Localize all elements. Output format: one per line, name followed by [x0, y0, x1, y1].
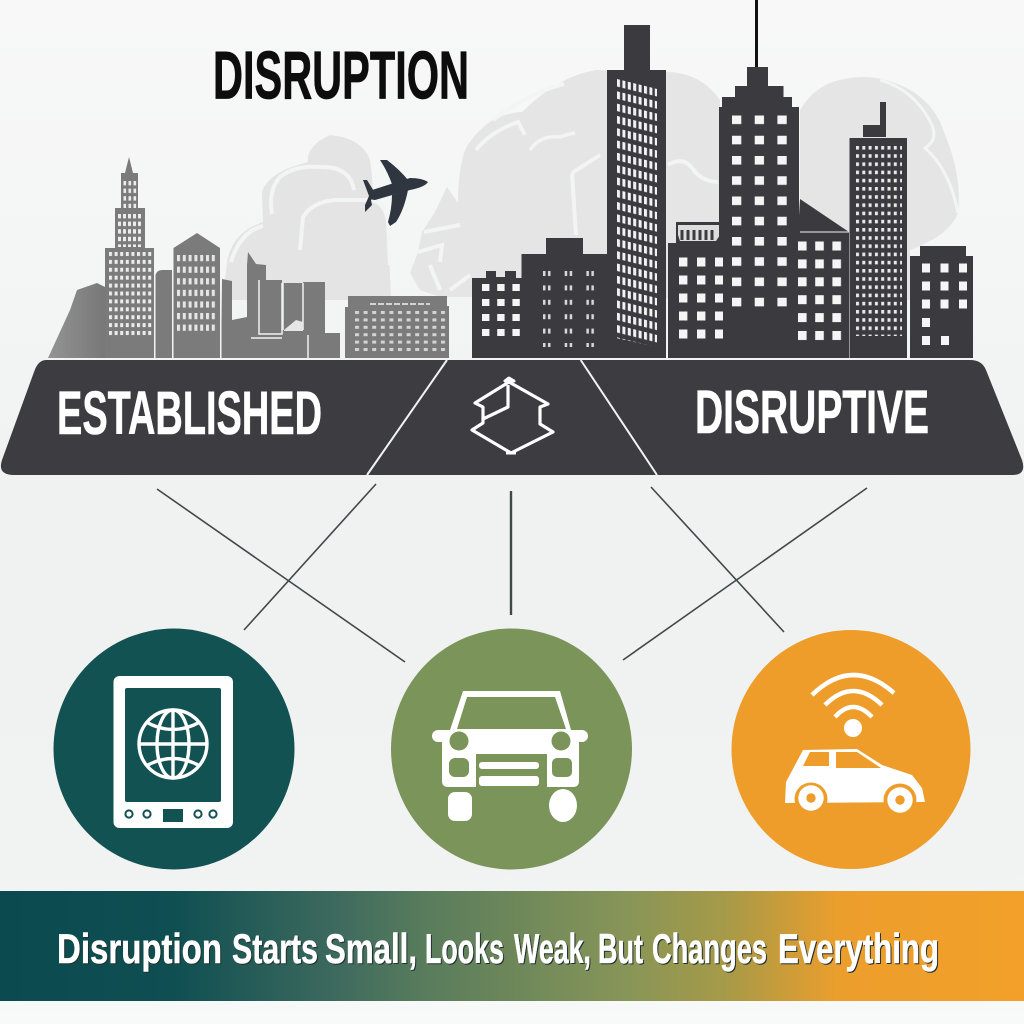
established skyline: [48, 157, 449, 358]
tagline: But: [598, 925, 643, 972]
icon circle: car front: [391, 628, 632, 870]
title: DISRUPTION: [213, 38, 469, 114]
tagline: Everything: [778, 925, 939, 972]
icon circle: connected car: [732, 630, 970, 869]
tagline: Disruption: [57, 925, 222, 972]
tagline: [57, 925, 939, 972]
connector lines: [157, 484, 867, 662]
tagline: Changes: [652, 925, 767, 972]
bottom gradient banner: [0, 891, 1024, 1001]
icon: airplane: [363, 160, 428, 226]
icon circle: tablet with globe: [54, 628, 294, 870]
banner label: established: ESTABLISHED: [57, 379, 322, 447]
icon: banner centre shape: [472, 378, 553, 453]
tagline: Looks: [425, 925, 504, 972]
background clouds: [223, 70, 959, 300]
tagline: Small,: [325, 925, 417, 972]
tagline: Weak,: [514, 925, 591, 972]
disruptive skyline: [472, 0, 973, 358]
tagline: Starts: [232, 925, 318, 972]
banner: established / disruptive: [1, 360, 1023, 475]
